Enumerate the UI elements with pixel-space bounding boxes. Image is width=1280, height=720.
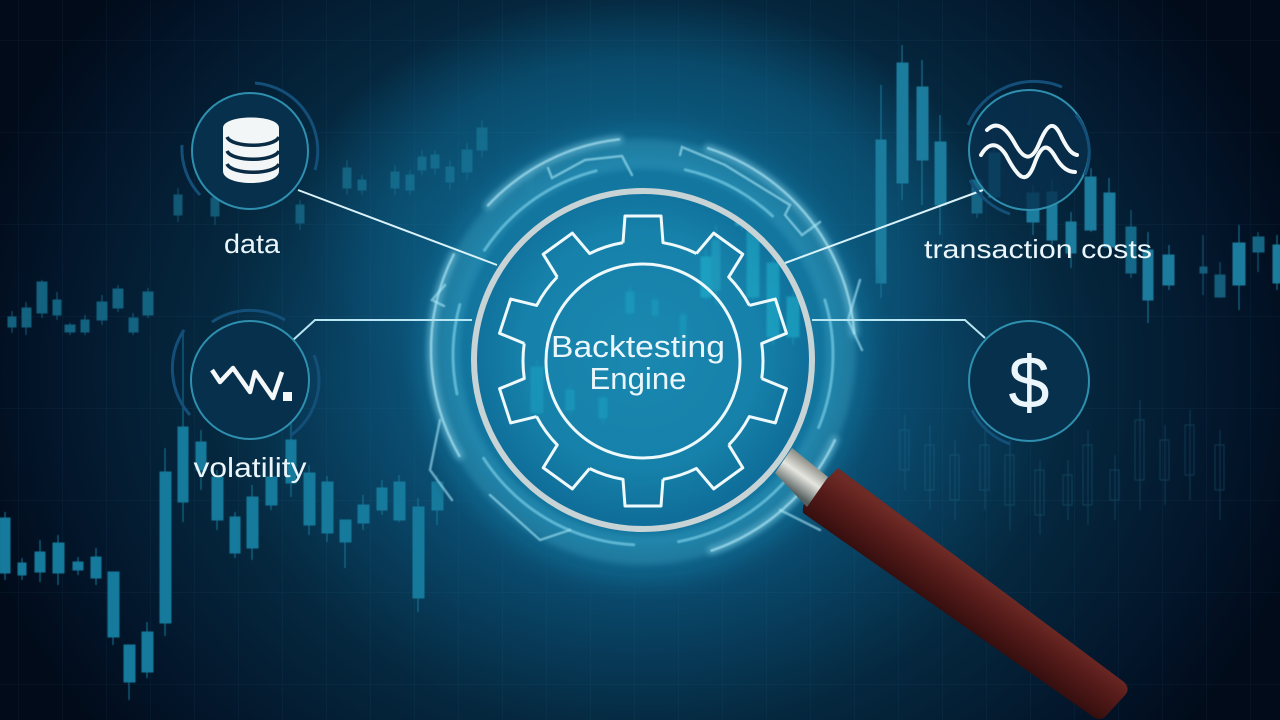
glowing halo disc bbox=[393, 102, 893, 602]
candlestick chart: upper left bbox=[8, 280, 153, 335]
title: Backtesting Engine: Backtesting bbox=[551, 329, 725, 364]
gear bbox=[489, 212, 797, 510]
title: Backtesting Engine: Engine bbox=[590, 361, 686, 396]
icon: waves bbox=[981, 126, 1077, 177]
candles seen through lens bbox=[530, 222, 800, 419]
node: transaction costs bbox=[924, 81, 1152, 264]
title: Backtesting Engine bbox=[551, 329, 725, 396]
candlestick chart: faint upper middle bbox=[174, 120, 534, 230]
candlestick chart: lower left bbox=[0, 330, 443, 700]
glowing technology rings bbox=[353, 60, 933, 640]
icon: dollar sign: $ bbox=[1008, 341, 1050, 424]
outer arc bbox=[968, 81, 1089, 214]
node: dollar bbox=[969, 321, 1089, 444]
label: transaction costs: transaction costs bbox=[924, 234, 1152, 264]
icon: database bbox=[223, 118, 279, 183]
icon: volatility line bbox=[212, 368, 292, 401]
node: volatility bbox=[172, 310, 319, 483]
label: volatility: volatility bbox=[194, 452, 306, 483]
connector: transaction costs bbox=[785, 190, 983, 263]
connector: data bbox=[298, 190, 497, 265]
outer arc bbox=[972, 410, 1010, 444]
label: data: data bbox=[224, 229, 281, 259]
lens glass bbox=[475, 192, 811, 528]
outer arc bbox=[182, 83, 318, 195]
lens rim bbox=[474, 191, 812, 529]
connector: dollar bbox=[812, 320, 985, 338]
handle bbox=[803, 468, 1128, 719]
icon circle bbox=[969, 321, 1089, 441]
magnifying glass bbox=[474, 180, 1128, 719]
icon circle bbox=[192, 93, 308, 209]
icon circle bbox=[969, 90, 1089, 210]
icon circle bbox=[191, 321, 309, 439]
metal neck bbox=[775, 448, 828, 507]
node: data bbox=[182, 83, 318, 259]
connector: volatility bbox=[292, 320, 472, 341]
outer arc bbox=[172, 310, 319, 436]
candlestick chart: upper right bbox=[876, 45, 1280, 323]
candlestick chart: faint lower right bbox=[900, 400, 1224, 535]
